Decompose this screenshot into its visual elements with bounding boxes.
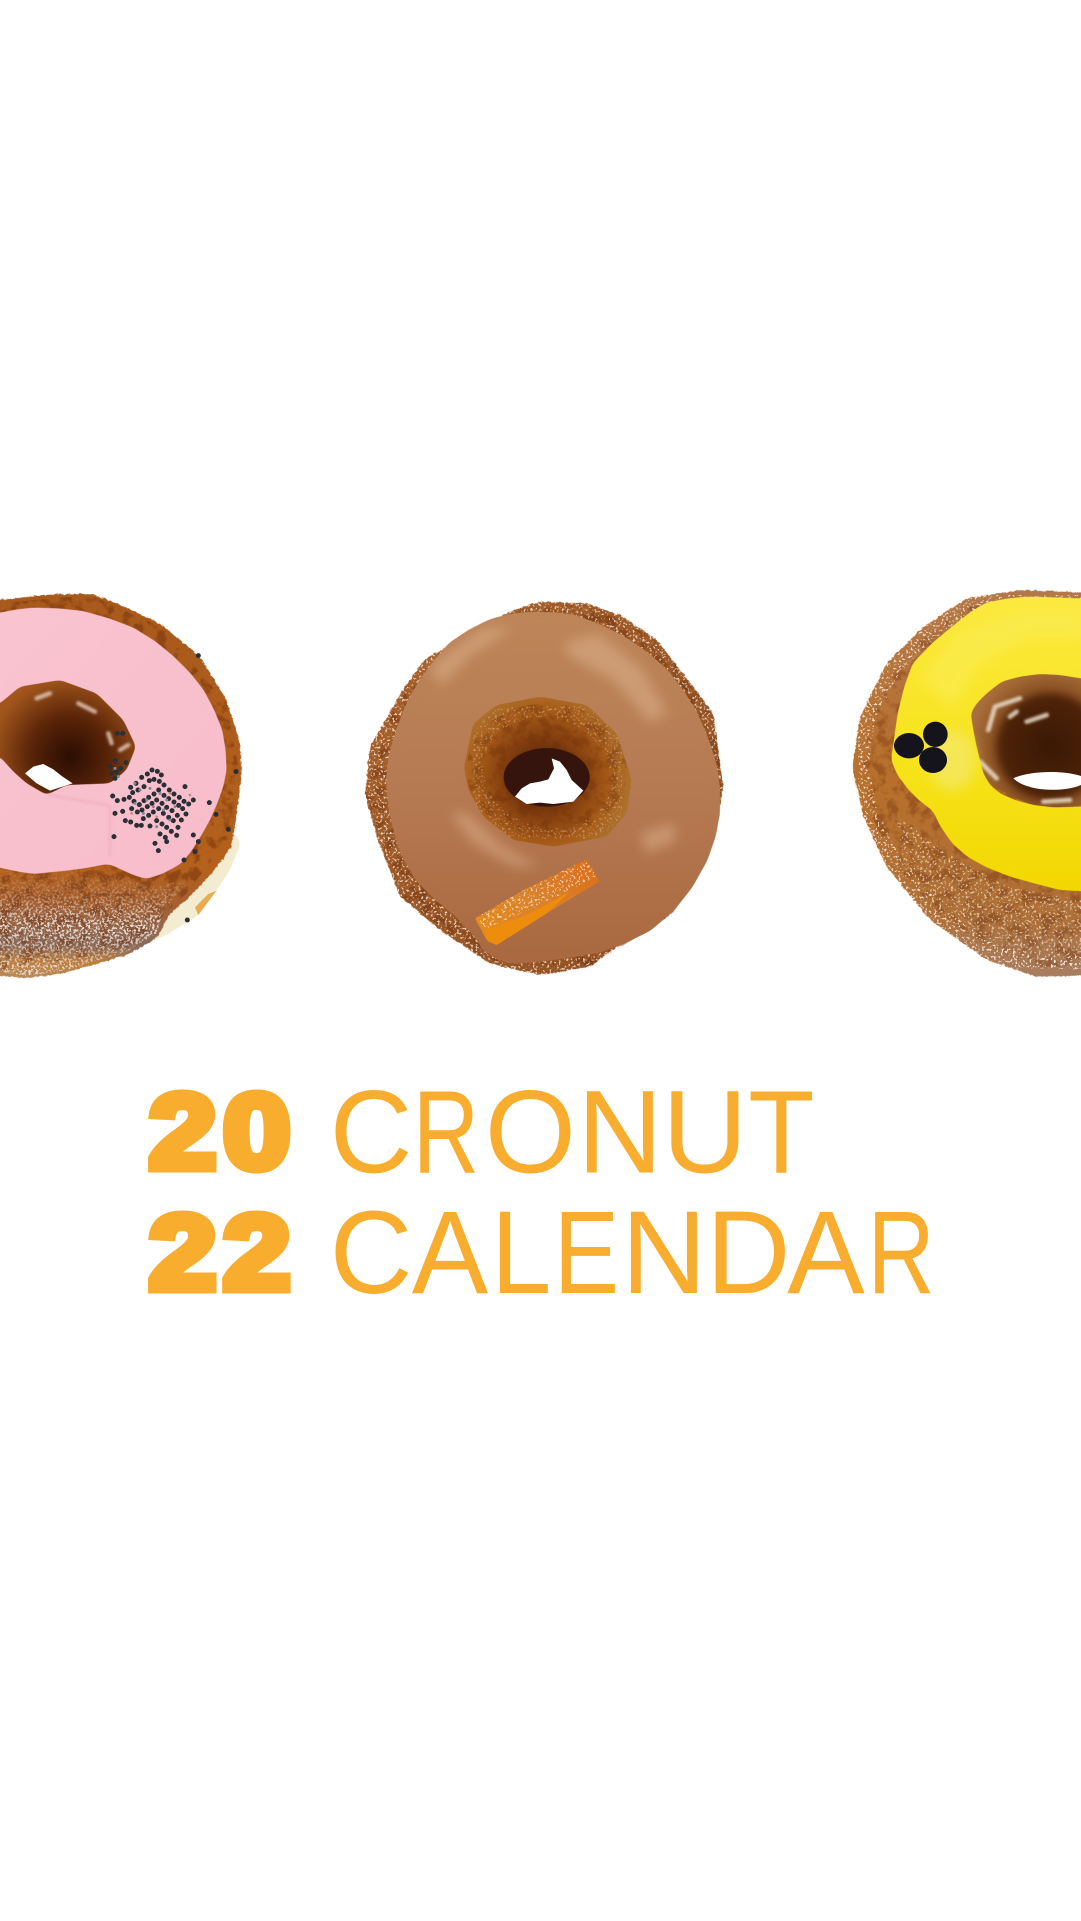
- caramel cronut hole ring sugar: [473, 707, 622, 838]
- pink cronut hole: [0, 677, 139, 798]
- yellow cronut icing highlight: [920, 610, 1081, 710]
- year numerals 20 and 22: 20: [149, 1073, 290, 1191]
- pink cronut inner flakes: [37, 693, 128, 750]
- word CRONUT: C: [330, 1066, 412, 1198]
- caramel cronut icing: [386, 612, 720, 964]
- caramel cronut hole see-through: [515, 758, 583, 804]
- word CALENDAR: D: [706, 1187, 790, 1319]
- chocolate pearls: [894, 722, 948, 773]
- pink cronut icing fold shadow: [48, 794, 110, 857]
- photo: yellow glazed cronut with chocolate pearls: [852, 590, 1081, 977]
- word CALENDAR: A: [412, 1187, 488, 1319]
- caramel cronut sugar coating: [365, 601, 723, 975]
- photo: caramel glazed cronut with candied orange peel: [365, 601, 723, 975]
- word CALENDAR: N: [621, 1187, 707, 1319]
- caramel cronut hole depth: [503, 748, 590, 807]
- pink cronut crust mottling: [0, 595, 240, 970]
- word CALENDAR: A: [787, 1187, 865, 1319]
- word CALENDAR: R: [868, 1187, 935, 1319]
- caramel cronut crust: [365, 602, 723, 975]
- word CRONUT: N: [577, 1066, 663, 1198]
- caramel cronut icing highlights: [430, 628, 677, 867]
- year numerals 20 and 22: [149, 1073, 290, 1312]
- pink cronut icing: [0, 608, 227, 879]
- word CALENDAR: E: [554, 1187, 619, 1319]
- yellow cronut icing pale patch: [928, 730, 975, 790]
- word CRONUT: R: [413, 1066, 479, 1198]
- word CRONUT: T: [748, 1066, 814, 1198]
- word CRONUT: O: [485, 1066, 576, 1198]
- yellow cronut crust: [852, 590, 1081, 977]
- year numerals 20 and 22: 22: [149, 1194, 290, 1312]
- caramel cronut hole: [461, 693, 635, 850]
- caramel cronut crust mottling: [365, 603, 723, 967]
- photo: pink glazed cronut with poppy seeds: [0, 593, 242, 978]
- word CALENDAR: C: [330, 1187, 412, 1319]
- pink cronut hole see-through: [25, 764, 73, 791]
- pink cronut crust: [0, 593, 242, 978]
- yellow cronut icing: [891, 597, 1081, 893]
- word CALENDAR: L: [491, 1187, 551, 1319]
- yellow cronut sugar coating: [858, 595, 1081, 968]
- word CRONUT: U: [662, 1066, 748, 1198]
- yellow cronut inner flakes: [980, 698, 1070, 802]
- yellow cronut hole: [967, 671, 1081, 810]
- pink cronut orange strip on the cream: [195, 891, 217, 915]
- caramel cronut hole texture: [467, 703, 627, 837]
- yellow cronut lower sugar dusting: [897, 817, 1081, 970]
- title: 2022 Cronut Calendar: [149, 1066, 935, 1319]
- yellow cronut crust mottling: [863, 600, 1081, 967]
- pink cronut sugar coating: [0, 863, 190, 976]
- candied orange peel: [475, 859, 599, 945]
- pink cronut cream layer: [140, 830, 241, 943]
- yellow cronut hole see-through: [1013, 772, 1081, 790]
- poppy seeds: [110, 656, 236, 920]
